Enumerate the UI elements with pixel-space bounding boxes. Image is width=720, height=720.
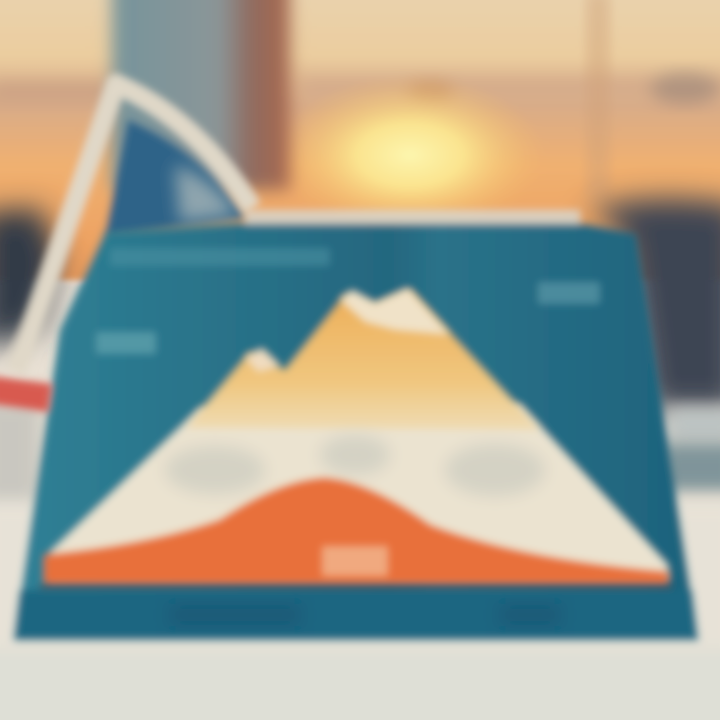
background: distant pole [588,0,608,200]
text block: blurred left label [96,332,156,354]
background: dark horizon right [590,199,720,410]
background: lower left pale area [0,400,40,510]
background: lower right strip [660,442,720,492]
icon: grey highlight in triangle [175,165,238,222]
text block: blurred orange label [322,546,388,576]
background: lower right pale block [668,408,720,440]
chart: cream base mountain [50,404,668,580]
chart: grey blurred labels [165,435,545,496]
background: table surface [0,500,720,720]
chart: white peak caps [340,288,450,335]
background: building [112,0,290,190]
text block: blurred heading strip [110,248,330,266]
background: table foreground [0,650,720,720]
axis: dark bottom line [40,584,672,590]
curve: white frame arc and pole [16,84,252,372]
icon: red base marker [0,376,52,412]
background: cloud band [0,72,720,104]
icon: sun glow [275,75,545,235]
text block: blurred axis strip [170,604,560,626]
chart: mountain area chart [44,288,668,584]
panel: dark lower strip [14,590,698,640]
chart: orange bottom layer [44,478,668,584]
text block: blurred right label [538,282,600,304]
background: dark horizon left [0,208,60,350]
panel: teal chart board [14,210,698,640]
chart: small left peak cap [245,348,280,372]
background: sunset sky [0,0,720,280]
panel: top highlight [245,210,580,224]
icon: dark blue triangle behind curve [105,120,246,236]
chart: yellow peak layer [186,290,540,430]
